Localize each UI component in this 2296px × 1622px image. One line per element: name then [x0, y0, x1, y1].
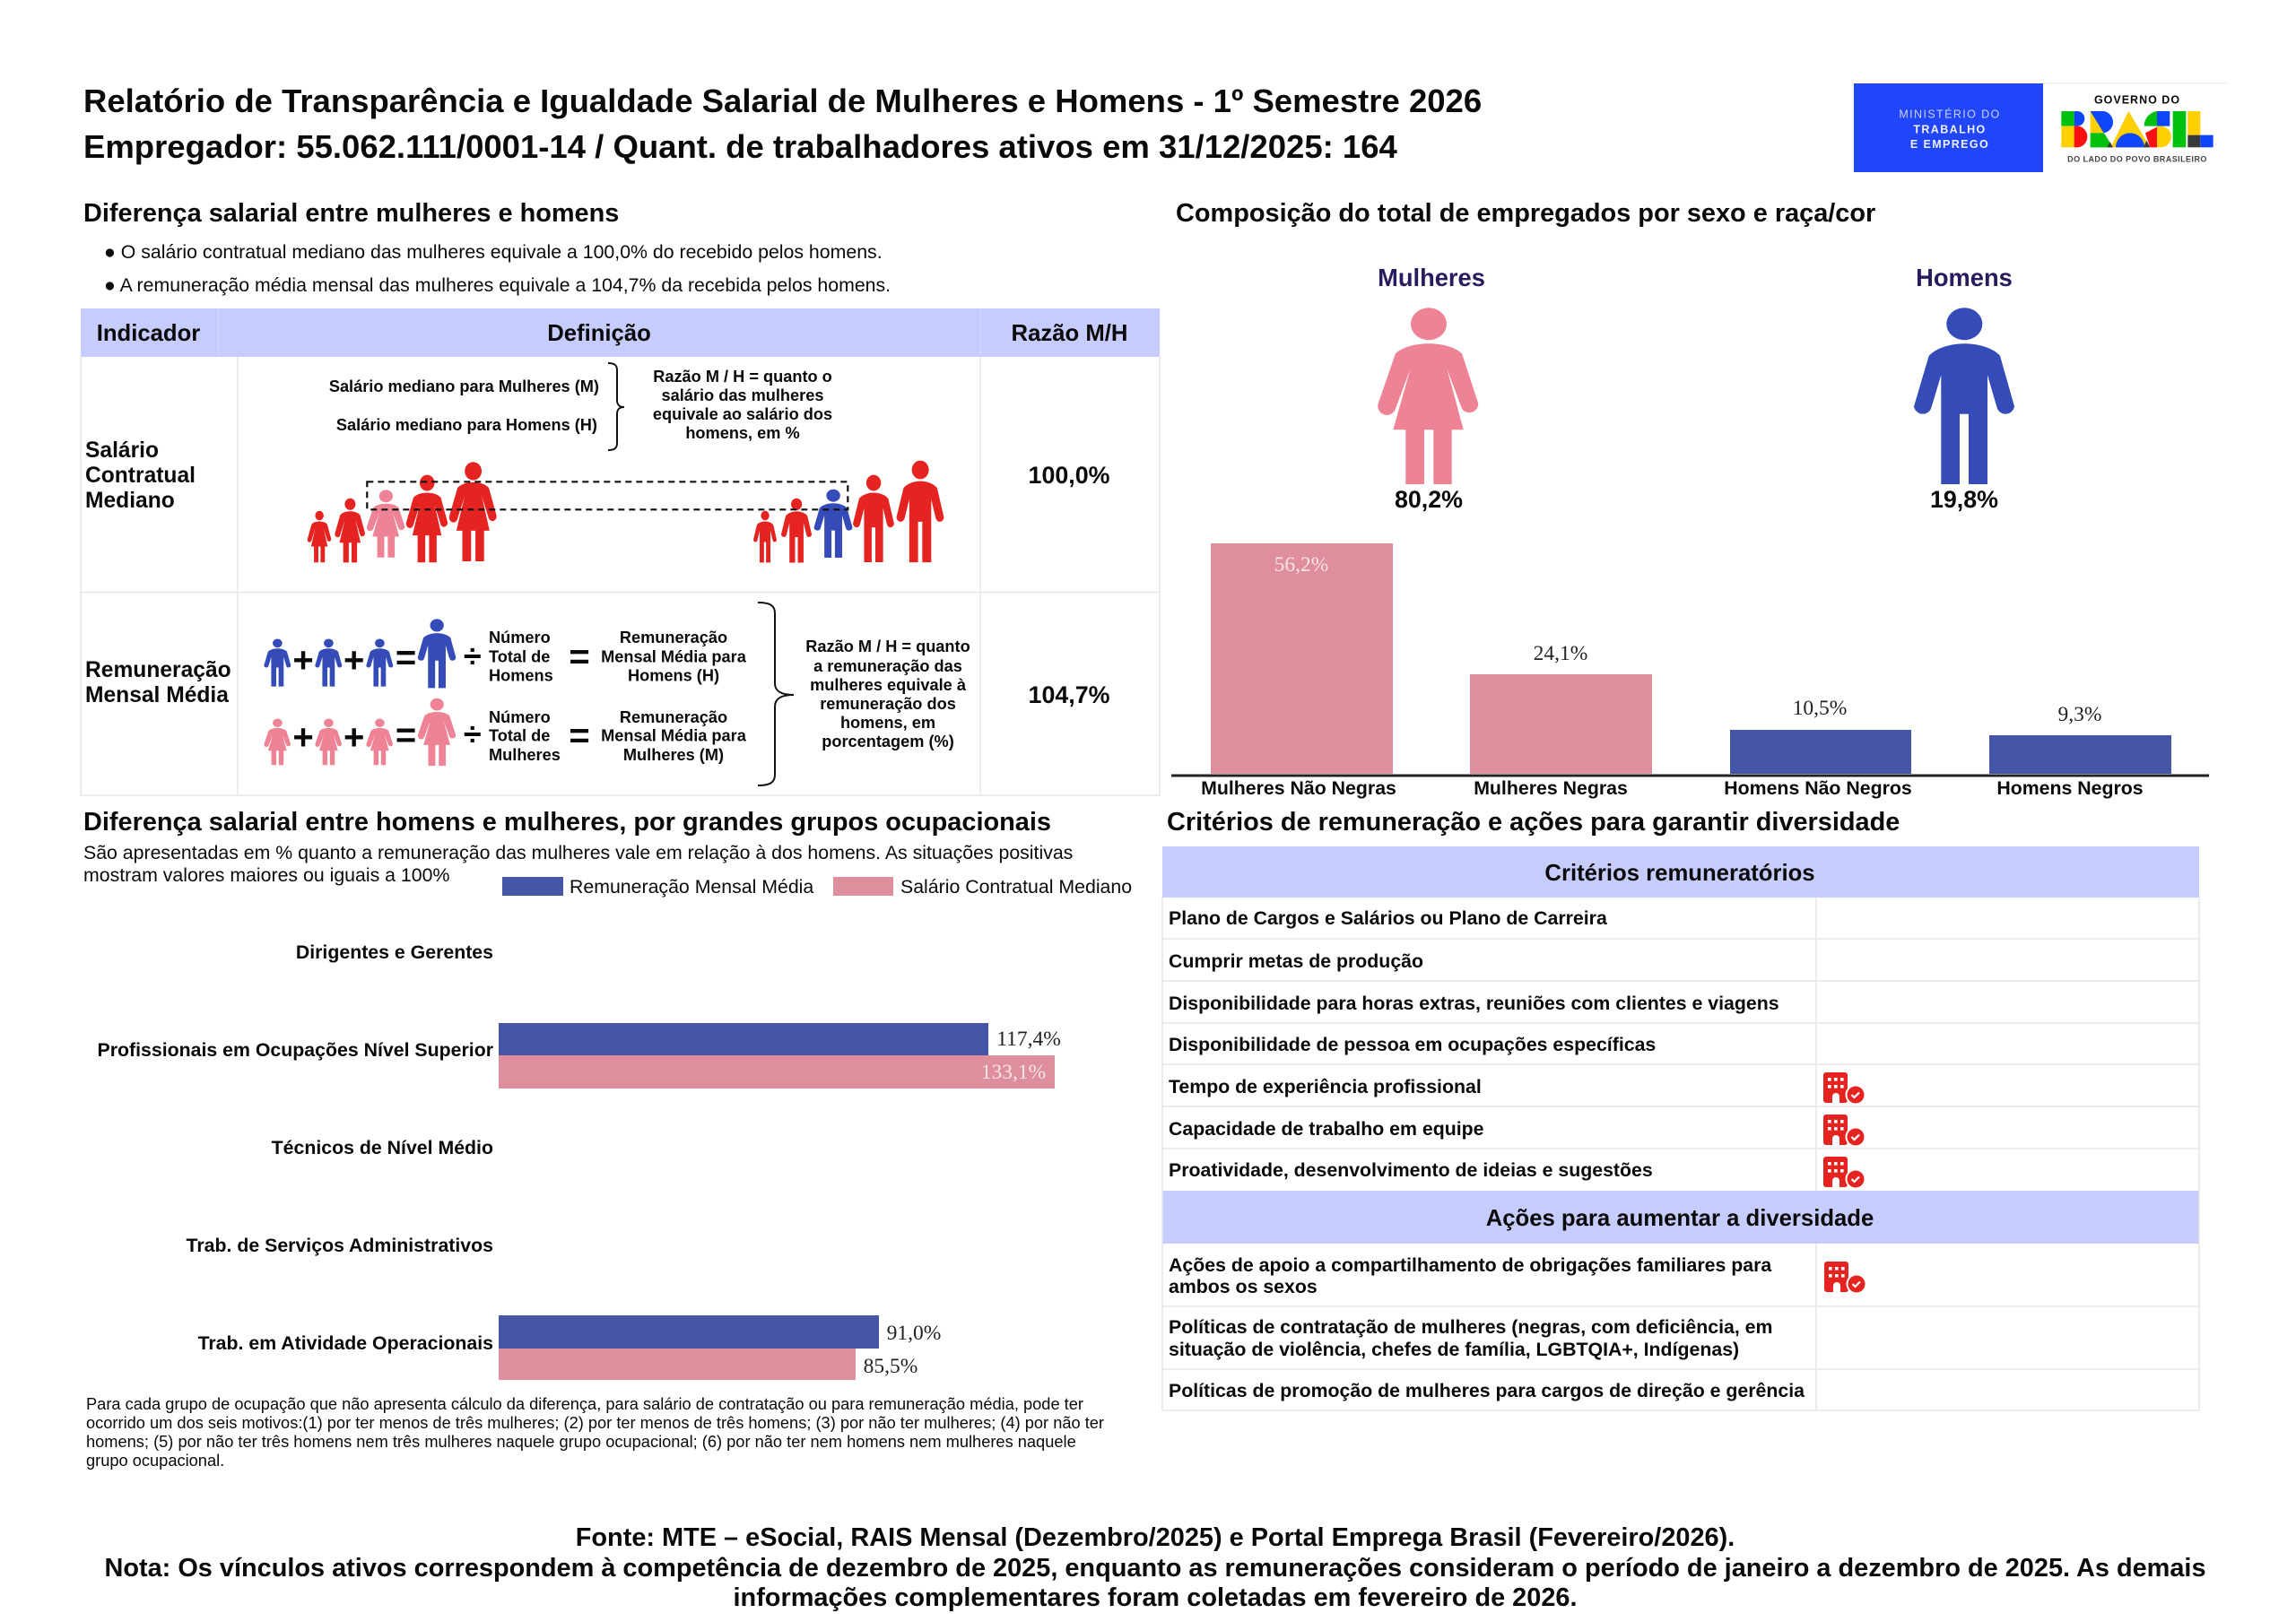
- panel: composição por sexo e raça: [1171, 199, 2209, 799]
- bar chart: grupos: 85,5%: [864, 1355, 918, 1378]
- footnote: ocorrido um dos seis motivos:(1) por ter menos de três mulheres; (2) por ter menos de três homens; (3) por não ter mulheres; (4) por não ter: [86, 1413, 1104, 1432]
- pictogram: mulheres: 80,2%: [1395, 486, 1463, 513]
- row: remuneração mensal média: porcentagem (%): [822, 733, 954, 750]
- brace: [608, 363, 624, 450]
- equation: homens: +: [344, 640, 364, 680]
- footer: fonte e nota: Fonte: MTE – eSocial, RAIS Mensal (Dezembro/2025) e Portal Emprega Brasil (Fevereiro/2026).: [576, 1523, 1735, 1552]
- bar chart: grupos: Trab. em Atividade Operacionais: [198, 1332, 493, 1354]
- equation: mulheres: +: [344, 717, 364, 757]
- table: indicadores: Indicador: [97, 321, 200, 346]
- equation: mulheres: ÷: [464, 716, 482, 752]
- row: remuneração mensal média: Remuneração: [85, 658, 231, 682]
- table: critérios e ações: Políticas de contratação de mulheres (negras, com deficiência, em: [1169, 1316, 1772, 1338]
- row: salário contratual mediano: Contratual: [85, 464, 196, 488]
- row: remuneração mensal média: a remuneração das: [813, 657, 962, 675]
- equation: homens: ÷: [464, 638, 482, 674]
- bar chart: grupos: Trab. de Serviços Administrativos: [187, 1235, 493, 1256]
- title: [83, 82, 1482, 165]
- row: remuneração mensal média: Mensal Média: [85, 683, 229, 707]
- legend: [502, 876, 1132, 898]
- row: remuneração mensal média: Razão M / H = quanto: [805, 638, 970, 655]
- row: salário contratual mediano: Mediano: [85, 489, 175, 513]
- bar chart: sexo e raça: Homens Não Negros: [1724, 777, 1912, 799]
- table: indicadores: [81, 308, 1160, 795]
- equation: homens: =: [396, 638, 416, 678]
- equation: mulheres: Mulheres (M): [623, 746, 724, 764]
- row: salário contratual mediano: Salário: [85, 438, 159, 463]
- pictogram: homens: 19,8%: [1930, 486, 1998, 513]
- logo: ministério e governo: GOVERNO DO: [2094, 93, 2180, 106]
- description: [83, 842, 1073, 886]
- table: critérios e ações: Capacidade de trabalho em equipe: [1169, 1118, 1484, 1140]
- title: Relatório de Transparência e Igualdade Salarial de Mulheres e Homens - 1º Semestre 2026: [83, 82, 1482, 119]
- row: salário contratual mediano: Razão M / H = quanto o: [653, 368, 832, 386]
- equation: mulheres: [264, 698, 747, 766]
- equation: homens: Homens: [489, 667, 553, 685]
- bar chart: sexo e raça: Mulheres Não Negras: [1201, 777, 1396, 799]
- table: critérios e ações: situação de violência, chefes de família, LGBTQIA+, Indígenas): [1169, 1339, 1739, 1360]
- bar chart: grupos: 91,0%: [887, 1322, 941, 1345]
- row: salário contratual mediano: Salário mediano para Mulheres (M): [329, 377, 599, 395]
- row: salário contratual mediano: [85, 363, 1110, 563]
- equation: homens: Homens (H): [628, 667, 719, 685]
- bar chart: grupos: Profissionais em Ocupações Nível Superior: [98, 1039, 493, 1061]
- equation: mulheres: =: [396, 716, 416, 755]
- row: remuneração mensal média: homens, em: [840, 714, 935, 732]
- table: indicadores: Razão M/H: [1012, 321, 1127, 346]
- panel: grupos ocupacionais: [83, 808, 1132, 1470]
- footnote: Para cada grupo de ocupação que não apresenta cálculo da diferença, para salário de contratação ou para remuneração média, pode ter: [86, 1394, 1083, 1413]
- heading: critérios: Critérios de remuneração e ações para garantir diversidade: [1167, 808, 1900, 837]
- bar chart: sexo e raça: 9,3%: [2058, 703, 2101, 726]
- equation: homens: +: [292, 640, 314, 680]
- logo: ministério e governo: E EMPREGO: [1910, 138, 1989, 151]
- bar chart: sexo e raça: Homens Negros: [1996, 777, 2144, 799]
- icon: empresa com ação: [1824, 1262, 1867, 1295]
- pictogram: homens: Homens: [1916, 264, 2013, 291]
- brace: [758, 603, 794, 785]
- equation: mulheres: Remuneração: [620, 708, 727, 726]
- footer: fonte e nota: informações complementares foram coletadas em fevereiro de 2026.: [734, 1583, 1577, 1612]
- bar chart: sexo e raça: [1171, 543, 2209, 799]
- equation: mulheres: Número: [489, 708, 551, 726]
- bullet text: ● A remuneração média mensal das mulheres equivale a 104,7% da recebida pelos homens.: [104, 274, 891, 296]
- pictogram: mulheres: Mulheres: [1378, 264, 1485, 291]
- equation: mulheres: =: [569, 716, 590, 755]
- heading: diferença salarial: Diferença salarial entre mulheres e homens: [83, 199, 619, 228]
- footer: fonte e nota: [104, 1523, 2206, 1612]
- legend: Remuneração Mensal Média: [570, 876, 813, 898]
- bar chart: sexo e raça: Mulheres Negras: [1474, 777, 1628, 799]
- equation: mulheres: Mensal Média para: [601, 726, 747, 744]
- equation: homens: Número: [489, 629, 551, 646]
- table: critérios e ações: Cumprir metas de produção: [1169, 950, 1423, 972]
- equation: mulheres: +: [292, 717, 314, 757]
- table: critérios e ações: Plano de Cargos e Salários ou Plano de Carreira: [1169, 907, 1607, 929]
- row: remuneração mensal média: [85, 603, 1110, 785]
- panel: critérios de remuneração: [1162, 808, 2199, 1410]
- description: São apresentadas em % quanto a remuneração das mulheres vale em relação à dos homens. As situações positivas: [83, 842, 1073, 863]
- table: critérios e ações: Critérios remuneratórios: [1544, 861, 1815, 886]
- footer: fonte e nota: Nota: Os vínculos ativos correspondem à competência de dezembro de 2025, enquanto as remunerações consideram o período de janeiro a dezembro de 2025. As demais: [104, 1554, 2206, 1583]
- title: Empregador: 55.062.111/0001-14 / Quant. de trabalhadores ativos em 31/12/2025: 164: [83, 128, 1398, 165]
- table: critérios e ações: Disponibilidade para horas extras, reuniões com clientes e viagens: [1169, 993, 1779, 1014]
- icon: empresa com critério: [1823, 1115, 1866, 1148]
- bullet text: [104, 241, 891, 296]
- equation: homens: Remuneração: [620, 629, 727, 646]
- bar chart: grupos: [98, 941, 1061, 1380]
- table: critérios e ações: Políticas de promoção de mulheres para cargos de direção e gerência: [1169, 1380, 1805, 1401]
- row: salário contratual mediano: equivale ao salário dos: [653, 405, 832, 423]
- bullet text: ● O salário contratual mediano das mulheres equivale a 100,0% do recebido pelos homens.: [104, 241, 883, 263]
- bar chart: sexo e raça: 56,2%: [1274, 553, 1328, 577]
- person icons: men: [753, 461, 944, 563]
- row: remuneração mensal média: 104,7%: [1029, 681, 1110, 708]
- panel: diferença salarial: [83, 199, 891, 296]
- icon: empresa com critério: [1823, 1157, 1866, 1189]
- pictogram: homens: [1914, 264, 2014, 513]
- equation: homens: Total de: [489, 647, 550, 665]
- heading: composição: Composição do total de empregados por sexo e raça/cor: [1176, 199, 1875, 228]
- logo: ministério e governo: DO LADO DO POVO BRASILEIRO: [2067, 154, 2207, 163]
- row: salário contratual mediano: homens, em %: [685, 424, 800, 442]
- legend: Salário Contratual Mediano: [900, 876, 1132, 898]
- table: critérios e ações: Tempo de experiência profissional: [1169, 1076, 1482, 1097]
- table: indicadores: Definição: [547, 321, 651, 346]
- bar chart: grupos: 117,4%: [996, 1028, 1061, 1051]
- row: salário contratual mediano: 100,0%: [1029, 462, 1110, 489]
- bar chart: grupos: Técnicos de Nível Médio: [272, 1137, 493, 1158]
- logo: ministério e governo: TRABALHO: [1913, 124, 1987, 136]
- bar chart: sexo e raça: 10,5%: [1793, 697, 1847, 720]
- logo: ministério e governo: [1854, 82, 2227, 172]
- description: mostram valores maiores ou iguais a 100%: [83, 864, 449, 886]
- row: salário contratual mediano: Salário mediano para Homens (H): [336, 416, 597, 434]
- table: critérios e ações: [1162, 846, 2199, 1410]
- row: remuneração mensal média: mulheres equivale à: [810, 676, 967, 694]
- heading: grupos ocupacionais: Diferença salarial entre homens e mulheres, por grandes grupos ocupacionais: [83, 808, 1051, 837]
- table: critérios e ações: Proatividade, desenvolvimento de ideias e sugestões: [1169, 1159, 1653, 1181]
- equation: mulheres: Total de: [489, 726, 550, 744]
- person icons: women: [308, 462, 497, 562]
- row: salário contratual mediano: salário das mulheres: [662, 386, 823, 404]
- icon: empresa com critério: [1823, 1072, 1866, 1105]
- logo: ministério e governo: MINISTÉRIO DO: [1899, 108, 2001, 120]
- equation: mulheres: Mulheres: [489, 746, 561, 764]
- pictogram: mulheres: [1378, 264, 1485, 513]
- equation: homens: =: [569, 637, 590, 676]
- bar chart: grupos: Dirigentes e Gerentes: [296, 941, 493, 963]
- footnote: grupo ocupacional.: [86, 1451, 224, 1470]
- footnote: [86, 1394, 1104, 1470]
- equation: homens: [264, 619, 747, 688]
- bar chart: sexo e raça: 24,1%: [1534, 642, 1587, 665]
- table: critérios e ações: Ações para aumentar a diversidade: [1486, 1206, 1874, 1231]
- table: critérios e ações: Ações de apoio a compartilhamento de obrigações familiares para: [1169, 1254, 1771, 1276]
- footnote: homens; (5) por não ter três homens nem três mulheres naquele grupo ocupacional; (6) por não ter nem homens nem mulheres naquele: [86, 1432, 1076, 1451]
- equation: homens: Mensal Média para: [601, 647, 747, 665]
- bar chart: grupos: 133,1%: [981, 1061, 1046, 1084]
- table: critérios e ações: Disponibilidade de pessoa em ocupações específicas: [1169, 1034, 1656, 1055]
- table: critérios e ações: ambos os sexos: [1169, 1276, 1318, 1297]
- row: remuneração mensal média: remuneração dos: [820, 695, 956, 713]
